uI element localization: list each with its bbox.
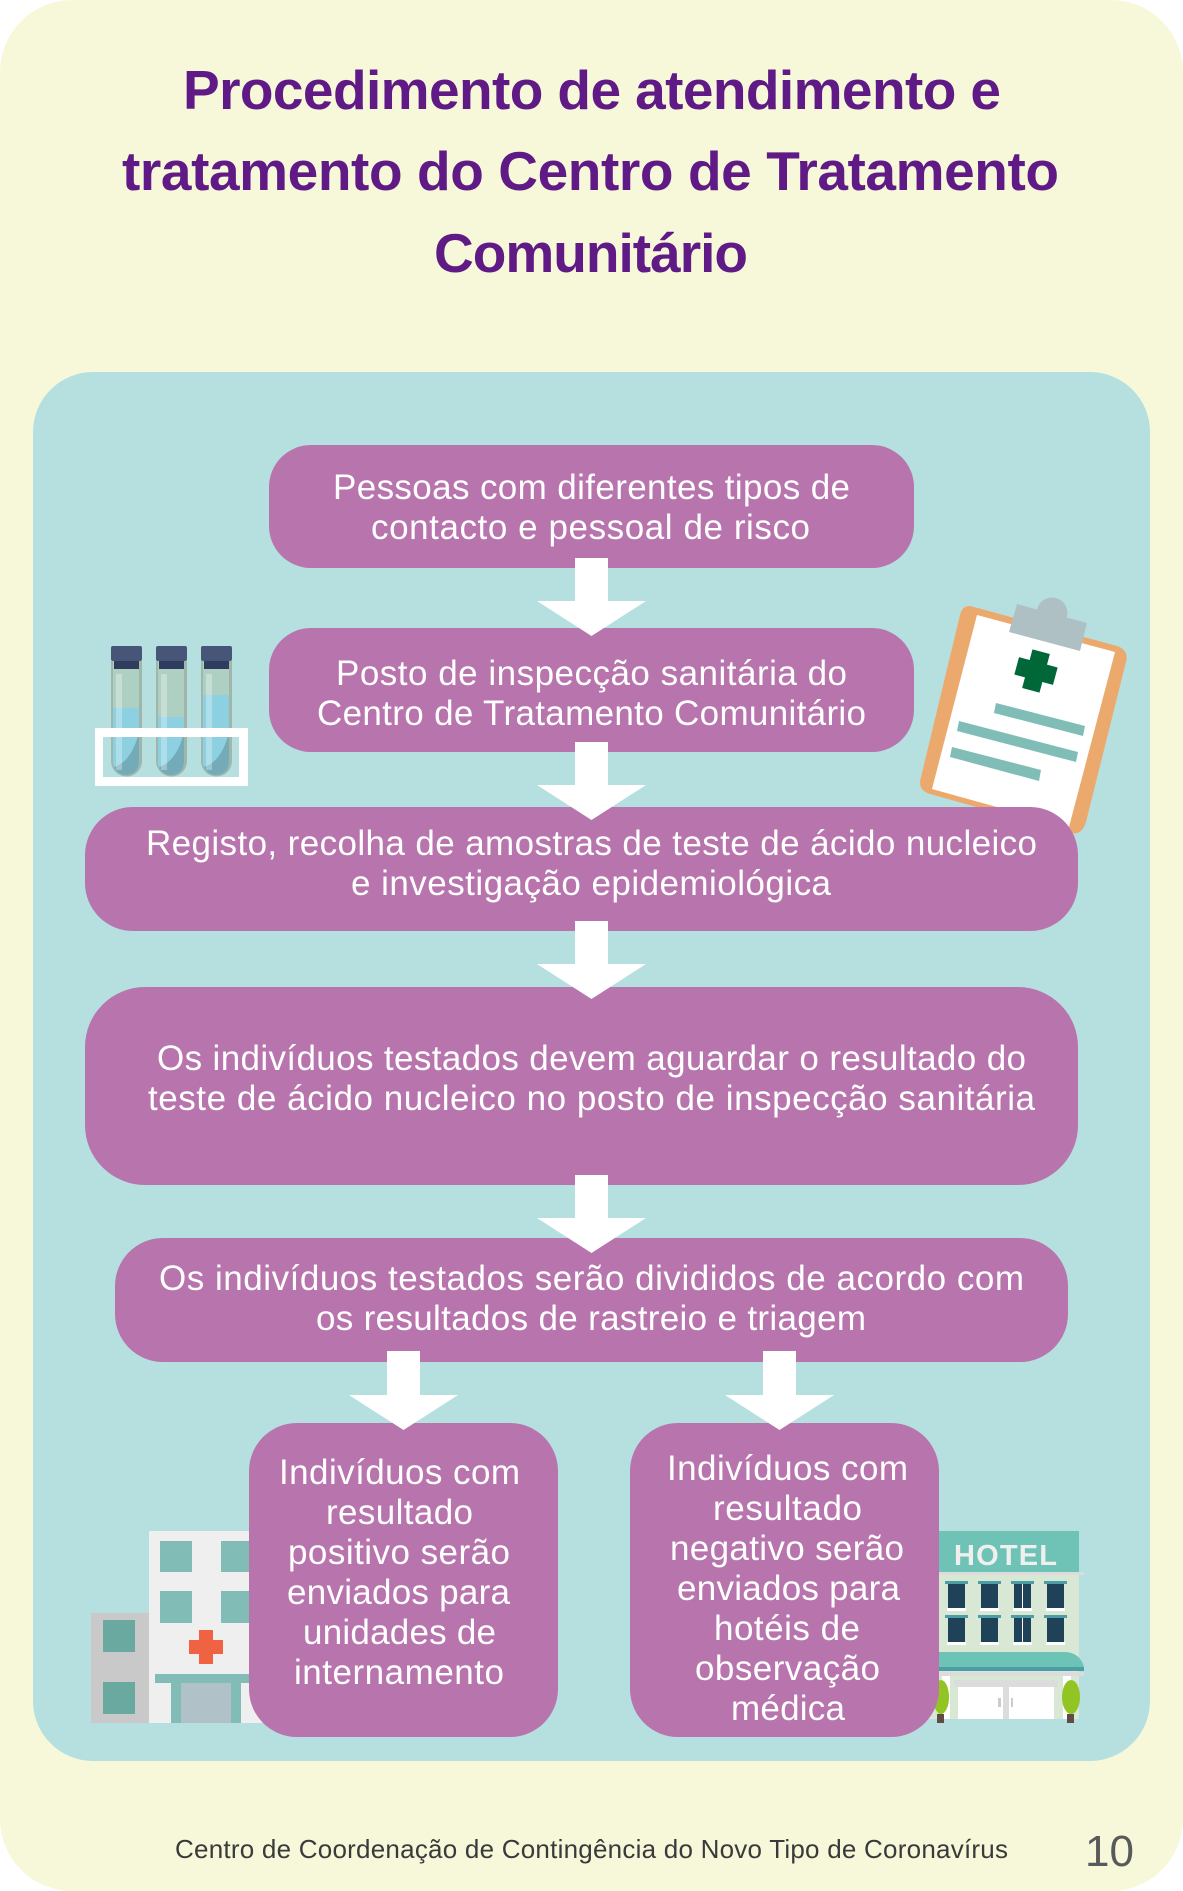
text: positive box: positivo serão — [288, 1533, 510, 1572]
arrow 3 — [537, 921, 646, 999]
text: positive box: unidades de — [303, 1613, 496, 1652]
text: negative box: enviados para — [677, 1569, 901, 1608]
text: box 3: Registo, recolha de amostras de teste de ácido nucleico — [146, 824, 1037, 863]
text: box 4: teste de ácido nucleico no posto de inspecção sanitária — [148, 1079, 1036, 1118]
page number: 10 — [1085, 1827, 1134, 1876]
arrow 1 — [537, 558, 646, 636]
text: positive box — [279, 1453, 520, 1692]
icon: hotel building — [925, 1531, 1084, 1723]
text: negative box: resultado — [713, 1489, 862, 1528]
text: box 5: os resultados de rastreio e triagem — [316, 1299, 866, 1338]
title — [122, 59, 1059, 284]
text: negative box: observação — [695, 1649, 880, 1688]
text: positive box: enviados para — [287, 1573, 511, 1612]
icon: hotel building: HOTEL — [954, 1540, 1057, 1572]
title: Procedimento de atendimento e — [183, 59, 1001, 121]
icon: hospital building — [91, 1531, 290, 1723]
title: tratamento do Centro de Tratamento — [122, 140, 1059, 202]
text: box 2: Centro de Tratamento Comunitário — [317, 694, 866, 733]
arrow 4 — [537, 1175, 646, 1253]
text: box 3 — [146, 824, 1037, 903]
flow box: registration and sampling — [85, 807, 1078, 931]
text: negative box: Indivíduos com — [667, 1449, 908, 1488]
flow box: inspection post — [269, 628, 914, 752]
flow box: triage — [115, 1238, 1068, 1362]
text: box 4: Os indivíduos testados devem aguardar o resultado do — [157, 1039, 1026, 1078]
flow box: waiting for result — [85, 987, 1078, 1185]
text: negative box: médica — [731, 1689, 846, 1728]
text: negative box — [667, 1449, 908, 1728]
text: box 2: Posto de inspecção sanitária do — [336, 654, 847, 693]
icon: clipboard with medical cross — [920, 598, 1127, 834]
panel: flowchart background — [33, 372, 1150, 1761]
text: box 1: Pessoas com diferentes tipos de — [333, 468, 850, 507]
arrow 6: to negative — [725, 1351, 834, 1430]
flow box: positive result — [249, 1423, 558, 1737]
flow box: negative result — [630, 1423, 939, 1737]
text: positive box: internamento — [294, 1653, 504, 1692]
flow box: people with contact — [269, 445, 914, 568]
text: box 3: e investigação epidemiológica — [351, 864, 832, 903]
arrow 5: to positive — [349, 1351, 458, 1430]
text: box 1: contacto e pessoal de risco — [371, 508, 810, 547]
arrow 2 — [537, 742, 646, 820]
text: negative box: negativo serão — [670, 1529, 904, 1568]
icon: test tubes in rack — [95, 646, 248, 786]
text: negative box: hotéis de — [714, 1609, 860, 1648]
footer source line: Centro de Coordenação de Contingência do Novo Tipo de Coronavírus — [175, 1834, 1008, 1864]
text: box 2 — [317, 654, 866, 733]
text: positive box: resultado — [326, 1493, 473, 1532]
text: box 1 — [333, 468, 850, 547]
text: box 4 — [148, 1039, 1036, 1118]
text: box 5: Os indivíduos testados serão divididos de acordo com — [159, 1259, 1024, 1298]
title: Comunitário — [434, 222, 748, 284]
text: box 5 — [159, 1259, 1024, 1338]
text: positive box: Indivíduos com — [279, 1453, 520, 1492]
